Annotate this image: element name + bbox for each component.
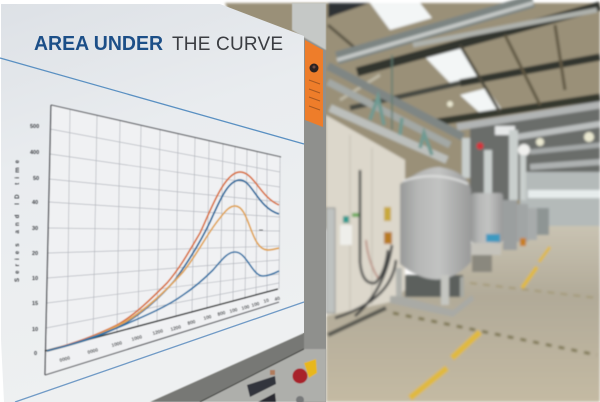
yellow box <box>304 359 317 378</box>
curve marker <box>259 229 263 231</box>
grey post <box>303 36 326 402</box>
lower blue rule <box>15 302 304 402</box>
x axis ticks: 0000 <box>87 347 99 356</box>
ceiling beams <box>328 6 600 122</box>
yellow floor dashes <box>410 247 550 398</box>
y axis ticks: 15 <box>32 301 38 307</box>
grid lines <box>46 110 280 346</box>
chart frame <box>45 105 281 375</box>
x axis ticks: 0000 <box>59 355 71 364</box>
orange warning label <box>305 40 323 127</box>
x axis ticks: 800 <box>187 319 197 327</box>
upper blue rule <box>0 58 304 144</box>
y axis ticks: 0 <box>34 351 37 357</box>
x axis ticks: 1000 <box>111 340 123 349</box>
y axis ticks: 20 <box>32 251 38 257</box>
x axis <box>45 289 278 351</box>
teal truss braces <box>370 55 432 155</box>
y axis ticks: 40 <box>32 200 38 206</box>
x axis ticks: 100 <box>229 307 239 315</box>
label lines <box>309 80 320 110</box>
hazard strips <box>393 313 597 355</box>
skylights <box>370 3 502 113</box>
lower knob <box>296 396 304 402</box>
floor <box>326 226 600 402</box>
orange curve <box>47 172 279 351</box>
y axis ticks: 30 <box>32 226 38 232</box>
y axis ticks: 10 <box>32 327 38 333</box>
control console <box>150 333 326 402</box>
main steel tank <box>390 167 474 317</box>
x axis ticks: 100 <box>203 314 213 322</box>
x axis ticks: 1000 <box>131 334 143 343</box>
far tanks <box>471 193 549 272</box>
low blue curve <box>47 252 279 351</box>
y axis ticks: 500 <box>30 124 39 130</box>
dark blue curve <box>47 180 279 351</box>
title: THE CURVE <box>172 34 283 55</box>
red warning light <box>476 142 484 150</box>
x axis ticks: 800 <box>217 310 227 318</box>
ceiling <box>225 3 600 230</box>
title <box>34 33 283 55</box>
knob <box>310 64 318 72</box>
x axis ticks: 100 <box>251 301 261 309</box>
pipes <box>328 1 600 167</box>
plot background <box>45 105 280 375</box>
x axis ticks: 40 <box>274 296 281 303</box>
black connector switch <box>247 376 276 397</box>
yellow-orange curve <box>47 206 279 351</box>
factory background <box>225 1 600 402</box>
white service wall <box>326 115 405 316</box>
hoses <box>328 170 396 335</box>
x axis ticks: 100 <box>241 304 251 312</box>
whiteboard panel <box>1 4 304 402</box>
red button <box>292 368 308 384</box>
y axis ticks: 400 <box>30 150 39 156</box>
steel columns <box>462 130 526 200</box>
far wall <box>520 172 600 228</box>
title: AREA UNDER <box>34 33 164 55</box>
aluminium upright <box>292 3 326 50</box>
x axis ticks <box>59 296 281 364</box>
y axis ticks: 50 <box>33 176 39 182</box>
x axis ticks: 1200 <box>152 328 164 337</box>
x axis ticks: 10 <box>263 298 270 305</box>
y axis title: Series and ID time <box>15 159 21 282</box>
line chart <box>15 105 281 375</box>
y axis ticks: 10 <box>32 276 38 282</box>
x axis ticks: 1200 <box>170 324 182 333</box>
ceiling lights <box>447 101 594 156</box>
y axis ticks <box>30 124 39 357</box>
